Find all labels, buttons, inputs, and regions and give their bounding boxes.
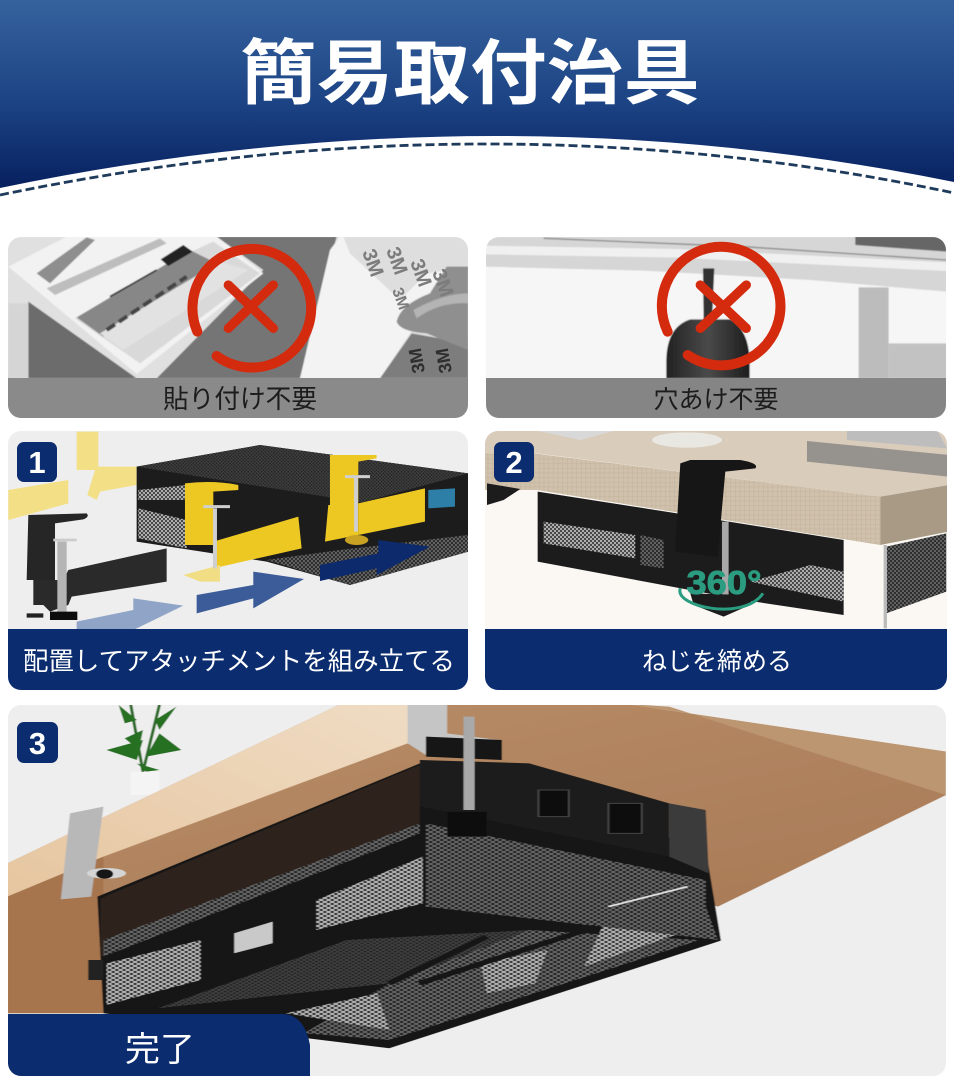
tape brand marks: 3M: [357, 246, 387, 280]
step badge 1: [17, 442, 57, 482]
tape brand marks: 3M: [405, 256, 435, 290]
rotation arrow: [680, 588, 763, 609]
step badge 1: 1: [28, 445, 46, 480]
step badge 3: [17, 722, 58, 763]
desk: [484, 430, 949, 545]
caption text: 完了: [125, 1031, 195, 1069]
tape brand marks: 3M: [432, 347, 456, 375]
caption text: 穴あけ不要: [654, 386, 778, 414]
photo: tape and tray: [7, 237, 470, 380]
panel: no drilling needed: [485, 237, 949, 418]
panel: step 3: [6, 703, 949, 1078]
caption text: ねじを締める: [642, 648, 792, 676]
organizer: [97, 763, 721, 1048]
caption strip: [8, 378, 468, 418]
yellow bracket centre: [183, 482, 302, 582]
clamp plate and rods: [61, 705, 709, 980]
photo: clamp on desk: [484, 430, 950, 637]
caption strip: [485, 629, 947, 690]
header dashed curve: [0, 144, 954, 195]
icon: red prohibition mark: [662, 247, 780, 365]
tape brand marks: 3M: [388, 286, 412, 312]
tape brand marks: 3M: [381, 244, 411, 278]
photo: organizer and brackets: [7, 430, 472, 637]
step badge 2: 2: [505, 445, 523, 480]
photo: installed organizer: [6, 703, 949, 1078]
plant: [106, 705, 182, 772]
tape brand marks: 3M: [405, 347, 429, 375]
tape brand marks: 3M: [427, 266, 457, 300]
desk: [7, 704, 946, 1013]
label: 360 degrees: 360°: [686, 564, 762, 601]
header banner: [0, 0, 954, 195]
caption strip: [486, 378, 946, 418]
step badge 2: [494, 442, 534, 482]
icon: red prohibition mark: [192, 249, 311, 368]
assembly arrows: [77, 540, 430, 630]
panel: no adhesive needed: [7, 237, 470, 418]
step badge 3: 3: [29, 726, 46, 761]
panel: step 1: [7, 430, 472, 690]
organizer body: [137, 445, 468, 585]
faded yellow brackets: [8, 432, 137, 520]
black clamp: [675, 460, 756, 617]
caption text: 貼り付け不要: [163, 384, 317, 414]
tape brand marks: [363, 247, 454, 373]
yellow bracket right: [325, 455, 425, 545]
panel: step 2: [484, 430, 950, 690]
organizer mesh: [487, 483, 946, 628]
caption tab: [8, 1014, 310, 1076]
caption text: 配置してアタッチメントを組み立てる: [23, 648, 455, 676]
black clamp: [27, 513, 167, 620]
bracket screws: [203, 477, 370, 568]
title: 簡易取付治具: [240, 35, 700, 114]
caption strip: [8, 629, 468, 690]
photo: drill under desk: [485, 237, 949, 380]
